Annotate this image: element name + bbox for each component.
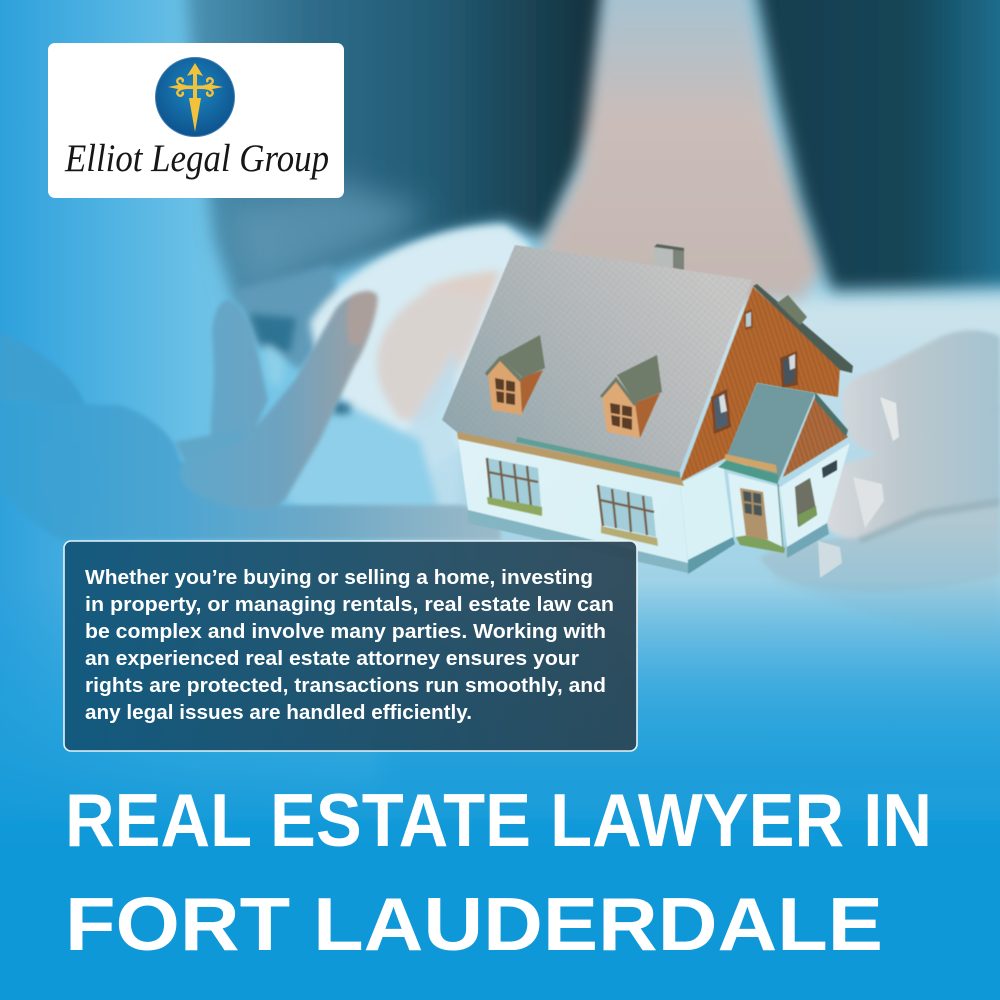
right hand bbox=[760, 330, 1000, 650]
fingernails bbox=[818, 397, 899, 578]
description text: Whether you’re buying or selling a home, investing bbox=[85, 567, 593, 589]
front door bbox=[740, 488, 768, 540]
description text: be complex and involve many parties. Working with bbox=[85, 621, 606, 643]
title: FORT LAUDERDALE bbox=[65, 882, 883, 966]
right window with flower box bbox=[598, 485, 658, 546]
right dark suit bbox=[752, 0, 1000, 290]
description text: an experienced real estate attorney ensures your bbox=[85, 648, 579, 670]
left hand bbox=[0, 291, 501, 540]
bottom fade to brand blue bbox=[0, 580, 1000, 826]
description text: rights are protected, transactions run smoothly, and bbox=[85, 675, 606, 697]
title bbox=[65, 778, 932, 966]
shirt sleeve and wrist bbox=[280, 225, 530, 510]
table surface bbox=[380, 296, 1000, 796]
suit jacket bbox=[185, 0, 612, 305]
shadow between fingers bbox=[250, 314, 350, 414]
main roof with shingles bbox=[442, 245, 752, 486]
walls and base bbox=[458, 437, 850, 574]
house illustration bbox=[442, 244, 853, 574]
left window with flower box bbox=[487, 458, 542, 516]
right dormer bbox=[600, 355, 662, 438]
chimney bbox=[654, 244, 684, 270]
description text: in property, or managing rentals, real estate law can bbox=[85, 594, 614, 616]
shirt bbox=[540, 0, 822, 300]
mid-tone behind the fingers bbox=[235, 265, 345, 370]
description panel bbox=[64, 541, 637, 751]
title: REAL ESTATE LAWYER IN bbox=[65, 778, 932, 862]
left dormer bbox=[485, 335, 545, 415]
logo card bbox=[48, 43, 344, 198]
description text: any legal issues are handled efficiently. bbox=[85, 702, 472, 724]
logo seal with cross bbox=[156, 58, 234, 136]
front porch gable bbox=[718, 383, 848, 484]
logo wordmark: Elliot Legal Group bbox=[64, 137, 329, 180]
description text bbox=[85, 567, 614, 724]
orange gable side bbox=[680, 284, 853, 482]
side windows bbox=[795, 460, 837, 527]
